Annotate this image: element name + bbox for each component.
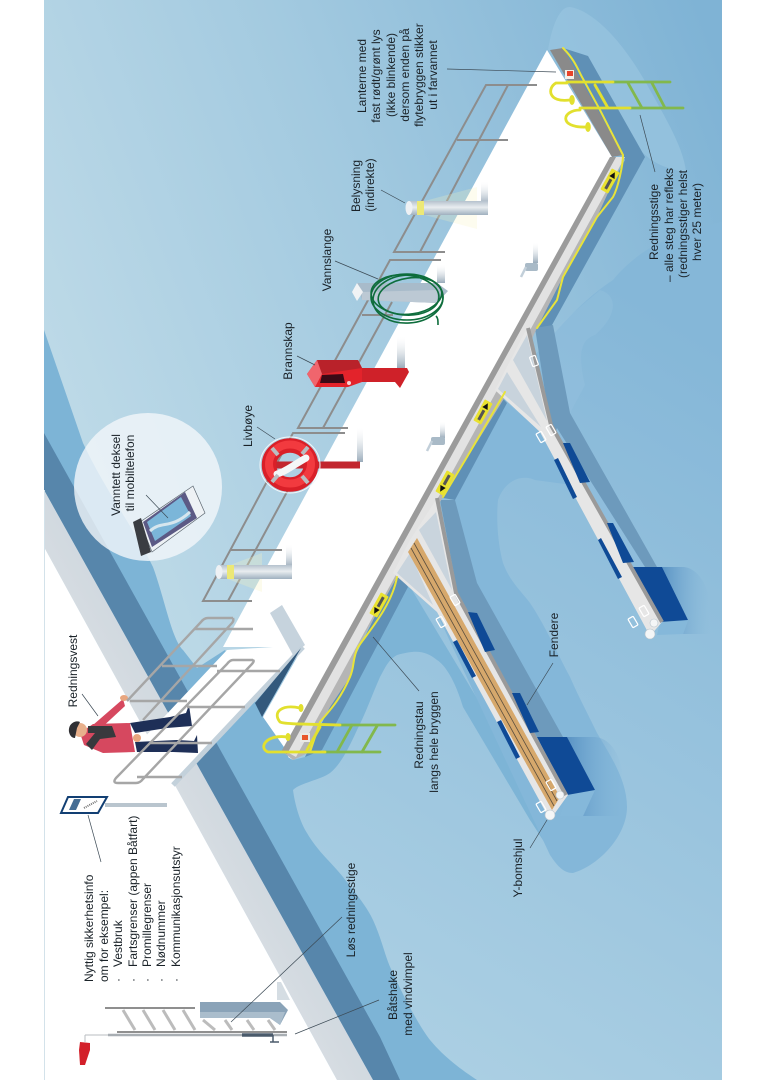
Y-boom wheels: finger two [545,791,564,820]
safety info sign [61,797,167,813]
deck [223,50,612,760]
label: lantern: flytebryggen stikker [412,23,426,127]
label: rescue rope: langs hele bryggen [427,691,441,793]
label: lantern: ut i farvannet [426,40,440,110]
end face with walkway [550,48,623,157]
label: waterproof phone cover: Vanntett deksel [109,434,123,516]
panel left edge line [44,490,46,1080]
label: boat hook: med vindvimpel [401,952,415,1036]
label: fire cabinet: Brannskap [281,322,295,380]
phone callout circle [74,413,222,561]
wooden decking [408,538,560,810]
gangway edge [173,647,303,785]
label: lighting [349,158,377,212]
label: water hose: Vannslange [320,228,334,291]
mooring cleats [436,355,649,813]
label: rescue ladder: (redningsstiger helst [676,169,690,278]
yellow walkway tags [369,168,620,618]
lower water [225,222,722,1080]
label: boat hook [386,952,415,1036]
label: lantern: fast rødt/grønt lys [369,29,383,123]
faucet one [521,243,538,277]
label: lighting: Belysning [349,160,363,212]
pontoon float: finger one [632,567,710,635]
gangway landing plate [270,605,305,655]
label: safety info: · [111,978,125,982]
label: rescue ladder: Redningsstige [647,184,661,260]
label: boat hook: Båtshake [386,970,400,1020]
shadow under dock tip [533,48,645,340]
label: safety info: · [140,978,154,982]
railing along dock [203,85,537,601]
label: safety info: · [154,978,168,982]
quay: grey edge [44,490,373,1080]
loose rescue ladder [105,982,290,1032]
quay: dark band [44,433,400,1080]
water hose post [352,265,448,325]
light post near tip [406,182,488,229]
label: life buoy: Livbøye [241,405,255,447]
label: rescue rope [412,691,441,793]
shadow: finger one [535,325,657,567]
label: loose ladder: Løs redningsstige [344,862,358,957]
label: safety info: Vestbruk [111,919,125,967]
label: lantern: dersom enden på [398,28,412,122]
light water beside finger one [553,290,613,413]
label: life vest: Redningsvest [66,634,80,707]
label: rescue ladder [647,168,704,282]
label: rescue rope: Redningstau [412,701,426,769]
finger one [495,328,662,639]
land [44,547,337,1080]
icon: phone in waterproof pouch [133,486,205,556]
label: waterproof phone cover: til mobiltelefon [123,435,137,511]
label: waterproof phone cover [109,434,137,516]
gangway railings [114,618,280,783]
label: lantern: (ikke blinkende) [384,33,398,117]
walkway dark edge [281,157,616,754]
label: fenders: Fendere [547,612,561,657]
light water around pier tip [548,7,686,172]
label: Y-boom wheel: Y-bomshjul [511,839,525,897]
person: life vest [69,695,198,753]
fenders: finger one [554,443,634,579]
label: safety info [82,816,183,982]
gangway shadow wedge [255,648,301,717]
Y-boom wheels: finger one [645,619,658,639]
finger two [393,498,568,820]
label: safety info: Fartsgrenser (appen Båtfart) [126,816,140,967]
label: rescue ladder: – alle steg har refleks [662,168,676,282]
leader lines [82,69,655,1034]
label: safety info: Promillegrenser [140,883,154,967]
label: safety info: Kommunikasjonsutstyr [169,846,183,967]
label: rescue ladder: hver 25 meter) [690,183,704,261]
shadow: section two [437,392,507,500]
icon: green hose coil [369,272,445,325]
walkway mid grey [283,157,623,760]
label: safety info: · [169,978,183,982]
fire cabinet [307,337,409,388]
shadow: finger two [440,500,563,737]
rescue rope along dock [310,48,623,752]
label: safety info: · [126,978,140,982]
lantern at dock tip [565,70,574,79]
label: safety info: Nyttig sikkerhetsinfo [82,874,96,982]
pontoon float: finger two [537,737,624,816]
label: safety info: Nødnummer [154,900,168,967]
label: safety info: om for eksempel: [97,890,111,982]
walkway light stripe [287,157,625,757]
boat hook with wind pennant [79,1035,287,1065]
label: lighting: (indirekte) [363,158,377,212]
life buoy [260,428,363,493]
ladder at inner dock end [264,704,395,752]
label: lantern: Lanterne med [355,39,369,113]
water strip inside finger one [553,428,645,567]
lantern at inner dock end [300,733,310,742]
light post near gangway [216,545,292,592]
gangway [130,605,305,785]
medium water between fingers [440,403,627,873]
label: lantern [355,23,440,127]
gangway deck [130,645,303,785]
faucet two [427,422,445,451]
fenders: finger two [453,612,539,759]
ladder at dock tip [551,82,683,132]
medium water along quay and pier [44,330,560,1080]
shadow: section three [305,572,408,757]
floating dock [223,48,710,820]
